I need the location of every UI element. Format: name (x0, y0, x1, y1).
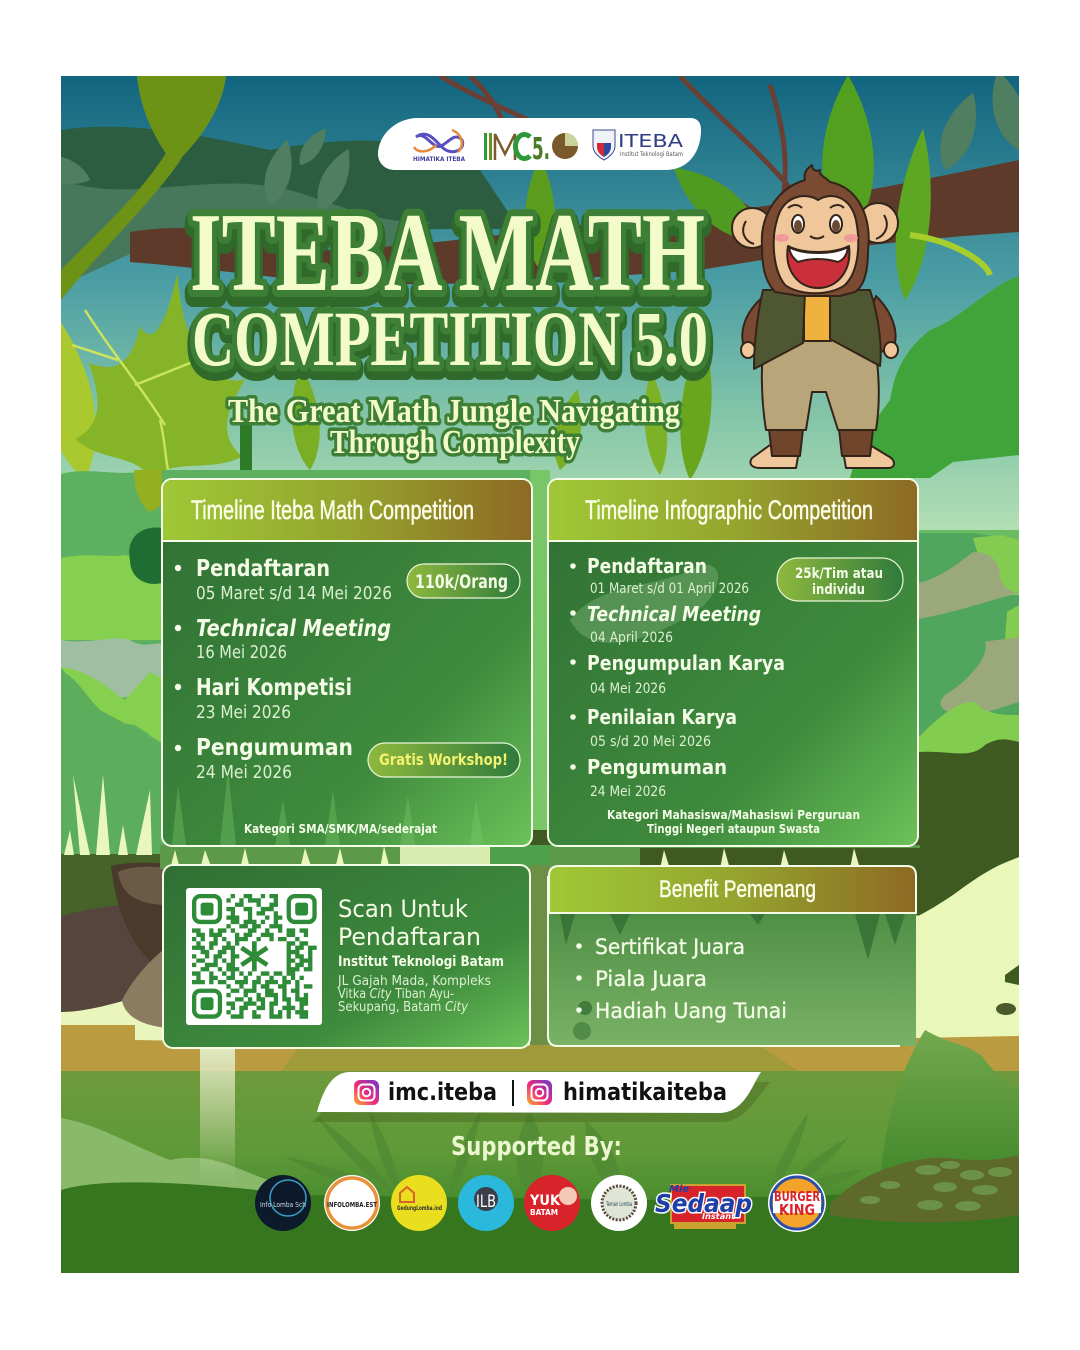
panel header (549, 480, 917, 541)
logo: Himatika ITEBA (413, 130, 465, 163)
timeline item: Pengumuman: Pengumuman (196, 735, 353, 761)
panel: QR registration (163, 865, 530, 1048)
icon: instagram (354, 1080, 379, 1105)
logo: Gedung Lomba: GedungLomba.ind (397, 1205, 442, 1212)
sponsor logos (255, 1174, 826, 1232)
QR code (186, 888, 322, 1025)
timeline item: Pengumpulan Karya (570, 651, 785, 697)
mascot head (762, 165, 869, 296)
price pill (407, 564, 520, 598)
panel: timeline Iteba Math Competition (162, 479, 532, 846)
background: brown twigs (438, 76, 791, 208)
timeline item: Penilaian Karya: Penilaian Karya (587, 705, 737, 729)
benefit list: Sertifikat Juara (595, 935, 745, 959)
background: right bush (850, 276, 1019, 478)
address: Sekupang, Batam City (338, 999, 469, 1015)
logo: Info Lomba Sch (255, 1175, 311, 1231)
logo: Yuk Batam: BATAM (530, 1208, 558, 1217)
subtitle (228, 393, 680, 461)
logo: Yuk Batam: YUK (529, 1193, 561, 1209)
icon: instagram (527, 1080, 552, 1105)
subtitle: The Great Math Jungle Navigating (228, 393, 680, 430)
background: dark trees on the right (530, 739, 1019, 916)
timeline item: Pengumuman: 24 Mei 2026 (196, 762, 292, 783)
timeline item: Pengumuman (570, 755, 727, 800)
mascot vest and shirt (754, 285, 881, 369)
workshop pill: Gratis Workshop! (379, 750, 508, 769)
category note: Kategori SMA/SMK/MA/sederajat (244, 821, 437, 836)
timeline item: Technical Meeting: Technical Meeting (587, 602, 761, 626)
logo: ITEBA (593, 130, 684, 160)
scan heading: Scan Untuk (338, 895, 468, 923)
logo: Gedung Lomba (391, 1175, 447, 1231)
mascot arms (741, 296, 898, 358)
mascot face (775, 205, 858, 288)
logo: Mie Sedaap: Mie (669, 1184, 689, 1195)
logo: IMC 5.0: 5. (532, 132, 550, 167)
timeline item: Technical Meeting: Technical Meeting (196, 616, 391, 642)
price pill: 25k/Tim atau (795, 566, 883, 582)
logo: IMC 5.0 (484, 132, 578, 167)
price pill: individu (812, 582, 865, 598)
title (190, 191, 708, 461)
logo: Burger King: KING (779, 1201, 815, 1219)
timeline item: Hari Kompetisi: 23 Mei 2026 (196, 702, 291, 723)
supported by heading: Supported By: (451, 1132, 622, 1162)
timeline item: Pendaftaran: Pendaftaran (196, 556, 330, 582)
background: dark branches (61, 127, 1019, 285)
panel header: Timeline Iteba Math Competition (191, 495, 474, 525)
timeline item: Pendaftaran: 01 Maret s/d 01 April 2026 (590, 581, 749, 597)
timeline item: Technical Meeting: 16 Mei 2026 (196, 642, 287, 663)
benefit list: Hadiah Uang Tunai (595, 999, 787, 1023)
price pill (777, 558, 903, 601)
logo: ITEBA: ITEBA (618, 131, 684, 152)
panel: timeline Infographic Competition (548, 479, 918, 846)
timeline item: Pendaftaran: Pendaftaran (587, 554, 707, 578)
panel header (549, 866, 916, 913)
background: bright leaves behind title and mascot (24, 75, 990, 491)
logo: ILB: ILB (476, 1192, 496, 1212)
timeline item: Pengumuman: 24 Mei 2026 (590, 784, 666, 800)
timeline item: Technical Meeting: 04 April 2026 (590, 630, 673, 646)
subtitle: Through Complexity (330, 424, 580, 461)
category note (607, 807, 860, 836)
logo: Mie Sedaap: Sedaap (655, 1189, 752, 1218)
timeline item: Hari Kompetisi (175, 675, 352, 723)
grass texture (172, 770, 484, 845)
category note: Tinggi Negeri ataupun Swasta (647, 821, 820, 836)
title line 1: ITEBA MATH (190, 197, 705, 321)
background: left and middle canopy (61, 470, 550, 860)
timeline item: Pengumpulan Karya: 04 Mei 2026 (590, 681, 666, 697)
timeline item: Pendaftaran: 05 Maret s/d 14 Mei 2026 (196, 583, 392, 604)
institute name: Institut Teknologi Batam (338, 954, 504, 970)
benefit list (576, 935, 787, 1023)
scan heading: Pendaftaran (338, 923, 481, 951)
mascot ears (732, 203, 898, 248)
social media banner: imc.iteba (388, 1078, 497, 1106)
logo: Teman Lomba (591, 1175, 647, 1231)
logo: Teman Lomba: Teman Lomba (605, 1201, 632, 1208)
mascot legs (762, 340, 879, 456)
title line 2: COMPETITION 5.0 (192, 300, 708, 387)
background: right canopy (919, 533, 1019, 754)
scan heading (338, 895, 481, 951)
logo: ILB (458, 1175, 514, 1231)
background: grey-green leaves (22, 66, 1033, 215)
background: pale clearing on the right (918, 857, 1019, 916)
timeline item: Penilaian Karya (570, 705, 737, 750)
background: left rocks and grass (61, 775, 164, 1028)
timeline item: Penilaian Karya: 05 s/d 20 Mei 2026 (590, 734, 711, 750)
panel: benefit pemenang (548, 866, 916, 1046)
background: olive plant (61, 76, 226, 300)
price pill: 110k/Orang (415, 571, 508, 593)
address: JL Gajah Mada, Kompleks (337, 973, 491, 989)
title line 1: ITEBA MATH (190, 191, 705, 315)
logo: Yuk Batam (524, 1175, 580, 1231)
timeline item: Technical Meeting (175, 616, 391, 663)
timeline item: Technical Meeting (570, 602, 761, 646)
logo: Mie Sedaap (655, 1184, 752, 1229)
title line 2: COMPETITION 5.0 (192, 295, 708, 382)
social media banner: himatikaiteba (563, 1078, 727, 1106)
background: middle gap with grass (160, 845, 1019, 1050)
background: ground and lower foliage (61, 1025, 1019, 1273)
mascot: monkey (732, 165, 898, 468)
logo: Info Lomba Sch: Info Lomba Sch (260, 1201, 306, 1209)
timeline item: Pengumuman (175, 735, 353, 783)
timeline item: Pendaftaran (175, 556, 392, 604)
workshop pill (368, 743, 520, 777)
benefit list: Piala Juara (595, 967, 707, 991)
logo: Mie Sedaap: Instant (702, 1212, 736, 1221)
logo: Infolomba.est (324, 1175, 380, 1231)
logo: Himatika ITEBA: HIMATIKA ITEBA (413, 156, 465, 163)
category note: Kategori Mahasiswa/Mahasiswi Perguruan (607, 807, 860, 822)
timeline item: Pendaftaran (570, 554, 749, 597)
panel header: Benefit Pemenang (659, 876, 816, 903)
social media banner (312, 1072, 770, 1122)
timeline item: Pengumuman: Pengumuman (587, 755, 727, 779)
timeline item: Pengumpulan Karya: Pengumpulan Karya (587, 651, 785, 675)
logo: Burger King (768, 1174, 826, 1232)
logo: Infolomba.est: INFOLOMBA.EST (327, 1201, 377, 1209)
mascot feet (750, 445, 894, 468)
top logo bar (378, 118, 701, 170)
timeline item: Hari Kompetisi: Hari Kompetisi (196, 675, 352, 701)
logo: Burger King: BURGER (774, 1190, 820, 1205)
panel header (163, 480, 531, 541)
blob texture (570, 565, 718, 643)
address: Vitka City Tiban Ayu- (338, 986, 454, 1002)
logo: ITEBA: Institut Teknologi Batam (620, 151, 683, 158)
panel header: Timeline Infographic Competition (585, 495, 873, 525)
address (337, 973, 491, 1015)
